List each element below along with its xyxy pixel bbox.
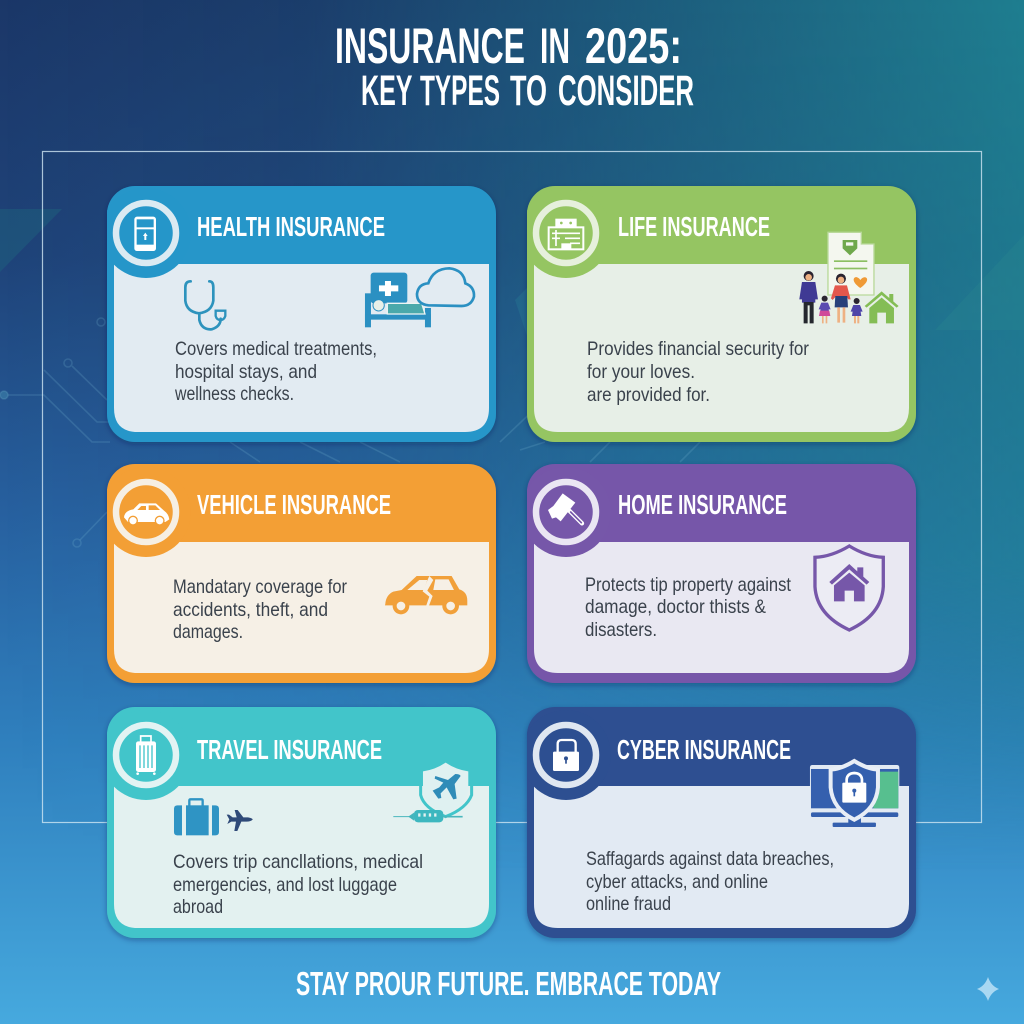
text: travel description: Covers trip cancllations, medical [173, 851, 423, 873]
icon: rolling suitcase [136, 736, 156, 775]
text: travel description [173, 851, 423, 918]
text: cyber description [586, 848, 834, 915]
text: travel description: abroad [173, 896, 223, 918]
heading: health insurance: HEALTH INSURANCE [197, 211, 385, 242]
text: life description: for your loves. [587, 361, 695, 383]
title [335, 18, 694, 115]
icon: hospital bed and cloud [365, 268, 474, 327]
icon: car [124, 503, 169, 525]
text: home description [585, 574, 791, 641]
icon: family with policy document and house [799, 232, 899, 323]
title: CONSIDER [558, 67, 694, 115]
title: 2025: [585, 18, 682, 74]
panel: vehicle insurance [101, 464, 496, 683]
panel: life insurance [521, 186, 916, 442]
title: IN [540, 18, 570, 74]
icon: gavel [548, 493, 582, 523]
text: health description [174, 338, 377, 405]
text: travel description: emergencies, and lost luggage [173, 874, 397, 896]
panel: cyber insurance [521, 707, 916, 938]
heading: cyber insurance: CYBER INSURANCE [617, 734, 791, 765]
text: health description: wellness checks. [174, 383, 294, 405]
text: cyber description: Saffagards against data breaches, [586, 848, 834, 870]
panel: home insurance [521, 464, 916, 683]
text: life description [587, 338, 809, 406]
icon: sparkle [977, 977, 999, 1001]
text: home description: disasters. [585, 619, 657, 641]
title: TYPES [420, 67, 500, 115]
heading: life insurance: LIFE INSURANCE [618, 211, 770, 242]
heading: travel insurance: TRAVEL INSURANCE [197, 734, 382, 765]
title: KEY [361, 67, 412, 115]
text: vehicle description [173, 576, 347, 643]
frame outline [42, 152, 982, 822]
text: vehicle description: Mandatary coverage for [173, 576, 347, 598]
icon: phone [134, 217, 156, 251]
icon: shield with house [815, 546, 883, 630]
text: cyber description: online fraud [586, 893, 671, 915]
icon: padlock [553, 740, 579, 771]
text: home description: Protects tip property against [585, 574, 791, 596]
heading: vehicle insurance: VEHICLE INSURANCE [197, 489, 391, 520]
text: health description: Covers medical treatments, [175, 338, 377, 360]
icon: stethoscope [185, 281, 225, 329]
text: home description: damage, doctor thists & [585, 596, 766, 618]
icon: damaged car [385, 576, 467, 614]
title: INSURANCE [335, 18, 525, 74]
icon: luggage and plane [174, 799, 253, 835]
icon: office building [549, 219, 583, 249]
text: health description: hospital stays, and [175, 361, 317, 383]
footer tagline: STAY PROUR FUTURE. EMBRACE TODAY [296, 965, 721, 1002]
heading: home insurance: HOME INSURANCE [618, 489, 787, 520]
title: TO [510, 67, 547, 115]
text: vehicle description: damages. [173, 621, 243, 643]
panel: health insurance [101, 186, 496, 442]
text: life description: are provided for. [587, 384, 710, 406]
panel: travel insurance [101, 707, 496, 938]
text: vehicle description: accidents, theft, and [173, 599, 328, 621]
text: cyber description: cyber attacks, and online [586, 871, 768, 893]
icon: shield with plane and syringe [393, 763, 472, 822]
text: life description: Provides financial security for [587, 338, 809, 360]
icon: monitor with shield lock [810, 759, 899, 827]
